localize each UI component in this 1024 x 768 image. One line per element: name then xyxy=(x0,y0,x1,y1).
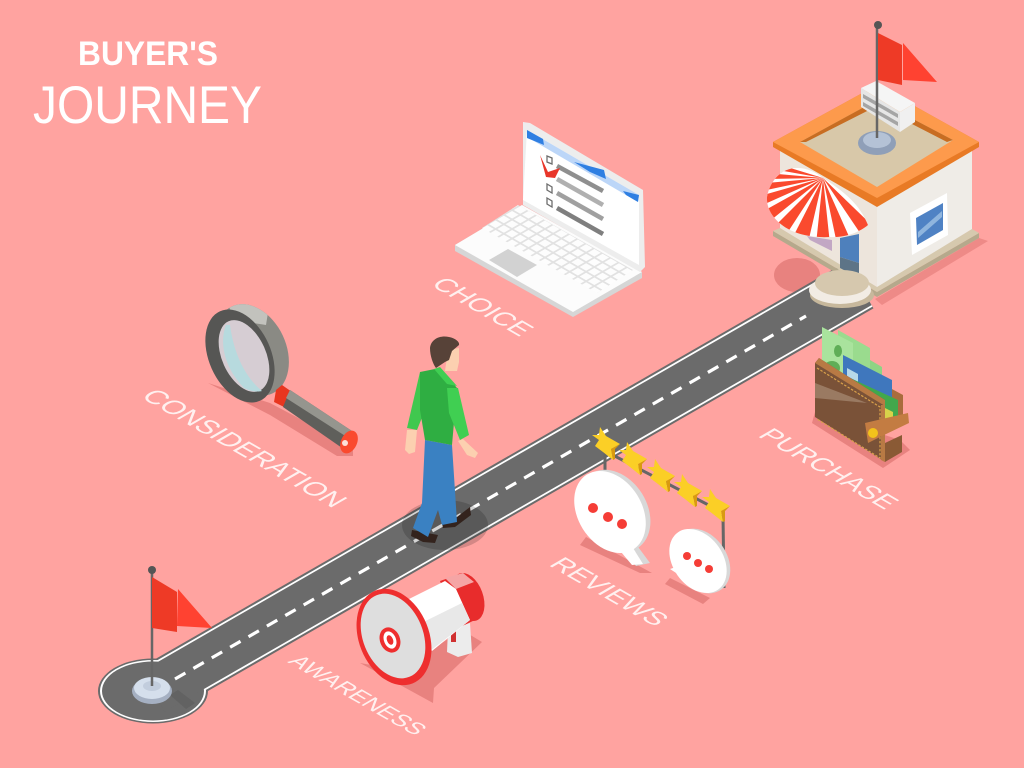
icon: magnifying glass xyxy=(205,304,358,456)
road xyxy=(98,285,860,724)
icon: megaphone xyxy=(343,568,491,703)
shop base xyxy=(773,231,979,297)
title xyxy=(33,35,262,135)
shop walls xyxy=(780,150,877,287)
five stars xyxy=(592,427,730,522)
shop awning xyxy=(767,168,868,238)
title: BUYER'S xyxy=(78,35,218,73)
shop roof xyxy=(773,85,979,207)
label: choice: CHOICE xyxy=(425,273,541,340)
icon: review stars and speech bubbles xyxy=(560,427,742,605)
wallet back xyxy=(890,388,903,425)
bubble shadows xyxy=(580,537,652,573)
label: awareness: AWARENESS xyxy=(283,651,433,739)
shop door xyxy=(840,234,859,263)
large bubble xyxy=(560,456,665,566)
wallet shadow xyxy=(812,412,910,468)
icon: laptop xyxy=(455,122,645,317)
label: consideration: CONSIDERATION xyxy=(135,385,354,512)
small bubble xyxy=(657,517,742,605)
icon: shop xyxy=(743,21,988,308)
roof vent xyxy=(861,81,915,112)
wallet body xyxy=(815,358,885,462)
star posts xyxy=(605,452,724,588)
bank cards xyxy=(843,355,898,428)
banknotes xyxy=(822,327,882,395)
title: JOURNEY xyxy=(33,76,262,135)
icon: man walking xyxy=(402,336,488,550)
shop steps xyxy=(810,282,874,308)
shop ground shadow xyxy=(774,258,820,292)
label: reviews: REVIEWS xyxy=(543,553,676,630)
start flag xyxy=(132,566,212,704)
icon: wallet with cash and cards xyxy=(812,327,910,468)
laptop checklist xyxy=(540,155,603,234)
roof flag xyxy=(858,131,896,155)
label: purchase: PURCHASE xyxy=(752,424,906,513)
shop window xyxy=(910,193,948,255)
shop shadow xyxy=(875,238,988,305)
